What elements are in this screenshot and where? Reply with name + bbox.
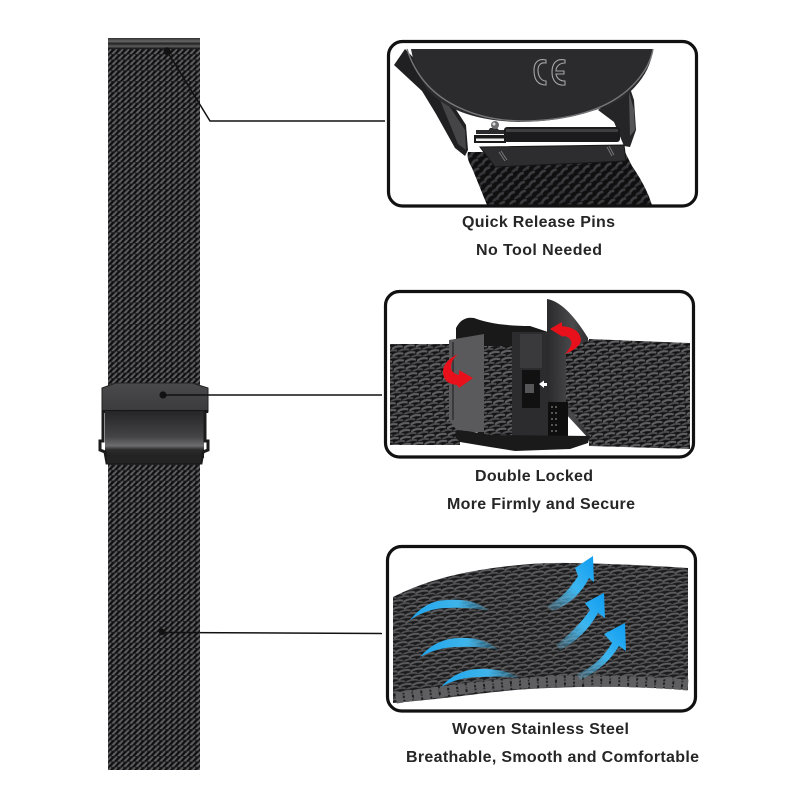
strap mesh lower: [108, 458, 200, 770]
open left leaf: [449, 334, 484, 432]
clasp lower bar: [455, 430, 590, 451]
caption: quick release pins: Quick Release Pins: [462, 214, 615, 231]
red arrow left: [443, 354, 473, 388]
clasp body: [512, 332, 552, 436]
blue swoosh 1: [410, 600, 490, 620]
release pin: [504, 127, 620, 142]
blue swoosh 2: [420, 638, 499, 657]
leader line: clasp: [159, 391, 382, 399]
inner mesh: [484, 346, 512, 438]
blue arrow 3: [577, 623, 626, 680]
lifted right leaf: [547, 299, 590, 440]
small white arrow: [539, 380, 547, 388]
panel: quick release pins: [388, 42, 696, 206]
watch case back: [411, 49, 653, 122]
caption: woven stainless steel: Breathable, Smooth and Comfortable: [406, 749, 699, 766]
watch strap: [100, 38, 208, 770]
panel: woven stainless steel: [388, 546, 696, 711]
caption: quick release pins: No Tool Needed: [476, 242, 602, 259]
strap mesh in detail: [468, 152, 652, 205]
caption: double locked: Double Locked: [475, 468, 593, 485]
right lug: [598, 88, 636, 147]
panel: double locked clasp: [386, 292, 694, 457]
caption: quick release pins: [462, 214, 615, 259]
red arrow right: [550, 322, 581, 354]
caption: woven stainless steel: Woven Stainless Steel: [452, 721, 629, 738]
left mesh: [390, 344, 460, 445]
clasp back: [456, 318, 548, 436]
leader line: mesh: [159, 629, 382, 635]
right mesh: [589, 339, 690, 449]
clasp end plate: [480, 145, 626, 167]
mesh rolled edge: [396, 681, 688, 698]
caption: woven stainless steel: [406, 721, 699, 766]
left lug: [394, 49, 468, 156]
leader line: quick release pins: [163, 47, 385, 121]
blue arrow 2: [556, 593, 605, 650]
caption: double locked: [447, 468, 635, 513]
blue arrow 1: [547, 556, 594, 611]
caption: double locked: More Firmly and Secure: [447, 496, 635, 513]
strap mesh upper: [108, 46, 200, 386]
strap top end bar: [108, 38, 200, 49]
fold-over clasp: [100, 383, 208, 463]
blue swoosh 3: [441, 669, 520, 687]
curved mesh: [393, 563, 688, 703]
CE mark: [534, 60, 565, 85]
